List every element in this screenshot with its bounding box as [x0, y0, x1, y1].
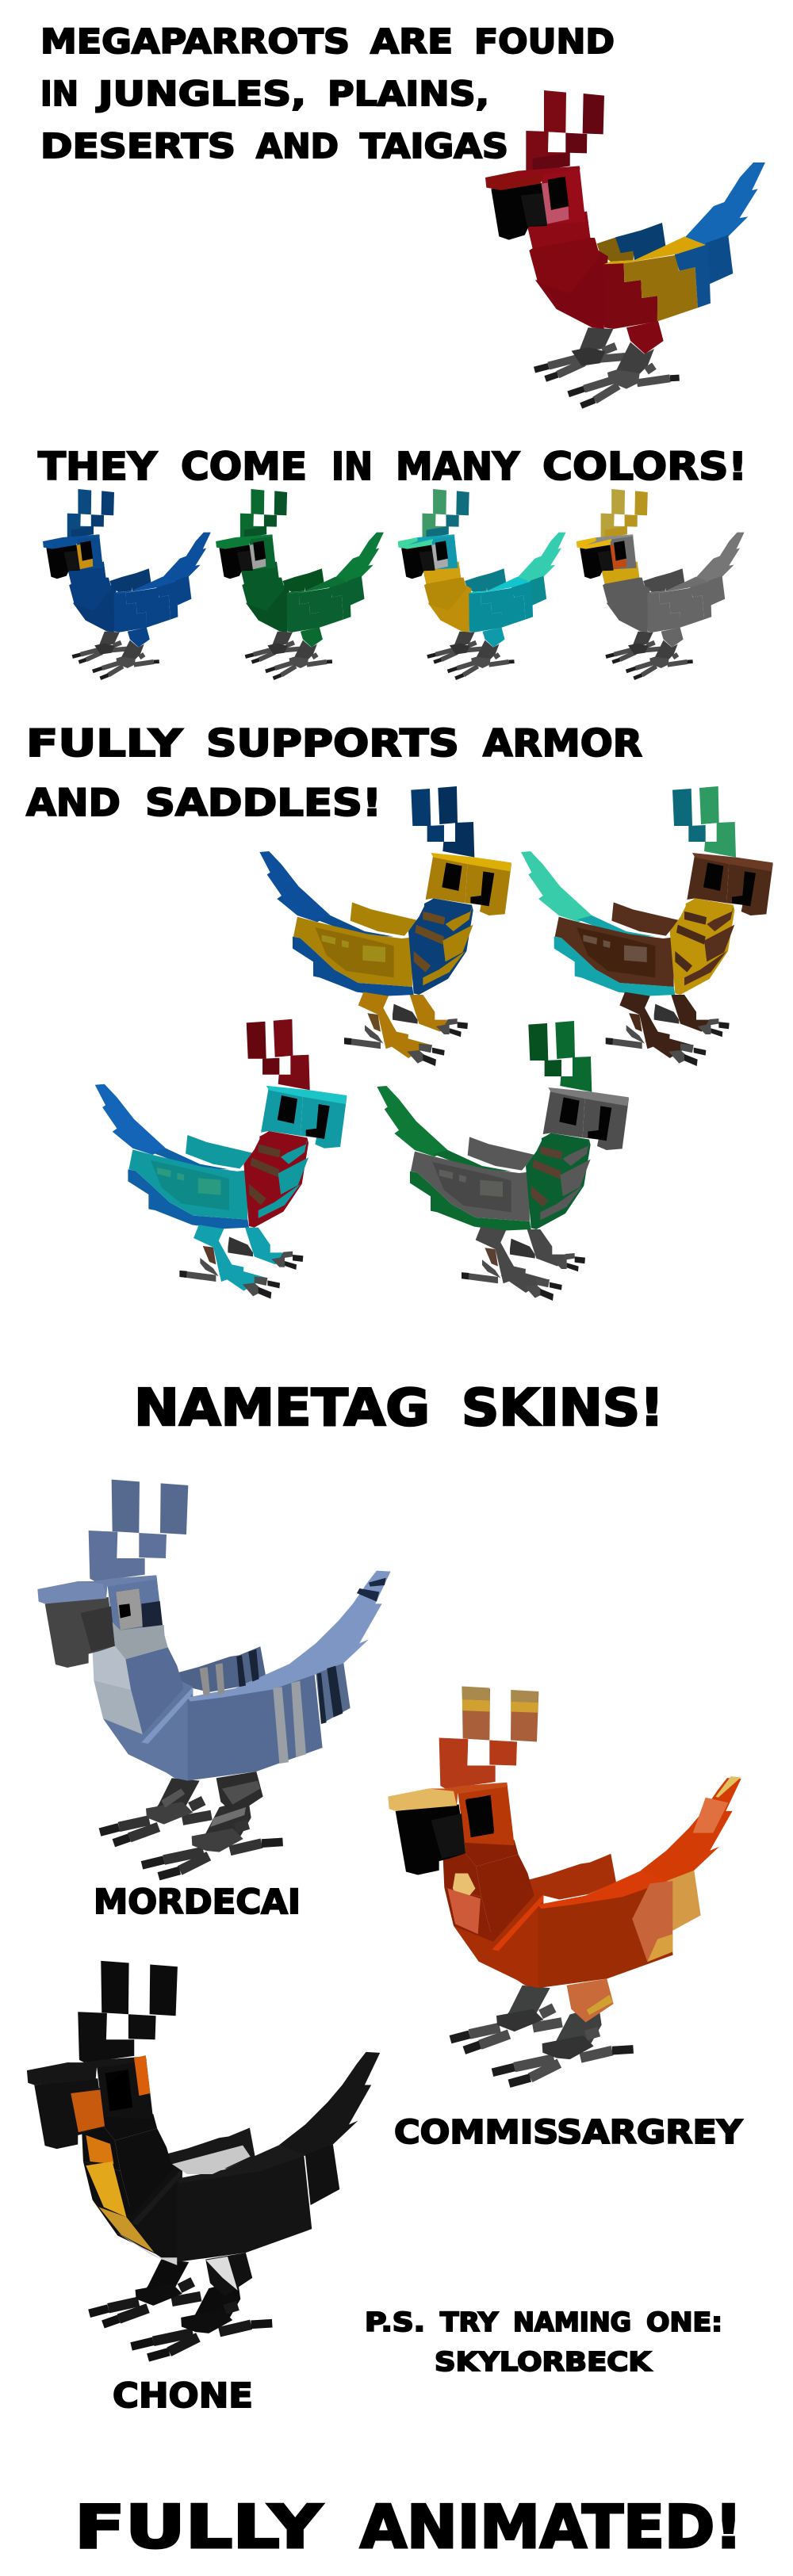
- heading: fully supports armor and saddles: AND: [26, 782, 121, 825]
- heading: where megaparrots are found: JUNGLES,: [96, 75, 306, 114]
- heading: they come in many colors: THEY: [38, 445, 158, 489]
- heading: fully supports armor and saddles: SADDLES!: [145, 782, 381, 825]
- heading: where megaparrots are found: AND: [256, 127, 339, 166]
- heading: nametag skins: SKINS!: [462, 1379, 664, 1438]
- parrot: green variant: [216, 489, 384, 678]
- heading: fully animated: FULLY: [75, 2492, 324, 2562]
- heading: where megaparrots are found: DESERTS: [40, 127, 236, 166]
- parrot: Mordecai blue jay skin: [37, 1480, 391, 1876]
- note: try naming one Skylorbeck: P.S.: [365, 2307, 425, 2337]
- parrot: diamond armor with saddle: [95, 1019, 347, 1299]
- heading: they come in many colors: COME: [181, 445, 307, 489]
- heading: fully animated: ANIMATED!: [360, 2492, 742, 2562]
- heading: fully supports armor and saddles: [26, 722, 642, 825]
- parrot: leather armor with saddle: [521, 786, 773, 1066]
- note: try naming one Skylorbeck: [365, 2307, 722, 2377]
- parrot: Chone black skin: [27, 1961, 380, 2357]
- note: try naming one Skylorbeck: TRY: [440, 2307, 499, 2337]
- label: CommissarGrey: COMMISSARGREY: [394, 2113, 743, 2151]
- note: try naming one Skylorbeck: SKYLORBECK: [435, 2346, 653, 2377]
- parrot: gold armor with saddle: [259, 786, 511, 1066]
- parrot: grey and yellow variant: [577, 489, 745, 678]
- heading: where megaparrots are found: TAIGAS: [360, 127, 508, 166]
- heading: where megaparrots are found: PLAINS,: [328, 75, 489, 114]
- heading: where megaparrots are found: [40, 22, 615, 166]
- heading: they come in many colors: COLORS!: [542, 445, 747, 489]
- heading: where megaparrots are found: ARE: [370, 22, 453, 62]
- parrot: aqua and gold variant: [398, 489, 566, 678]
- label: Chone: CHONE: [113, 2376, 253, 2416]
- heading: fully supports armor and saddles: ARMOR: [483, 722, 642, 766]
- heading: where megaparrots are found: MEGAPARROTS: [40, 22, 350, 62]
- heading: they come in many colors: MANY: [396, 445, 520, 489]
- heading: they come in many colors: IN: [331, 445, 373, 489]
- note: try naming one Skylorbeck: NAMING: [513, 2307, 631, 2337]
- parrot: scarlet main: [485, 90, 765, 406]
- heading: fully supports armor and saddles: FULLY: [26, 722, 183, 766]
- parrot: blue variant: [43, 489, 211, 678]
- heading: where megaparrots are found: FOUND: [474, 22, 615, 62]
- heading: nametag skins: NAMETAG: [134, 1379, 430, 1438]
- heading: where megaparrots are found: IN: [40, 75, 79, 114]
- label: Mordecai: MORDECAI: [94, 1882, 301, 1922]
- parrot: Commissar Grey phoenix skin: [388, 1687, 741, 2084]
- parrot: iron armor with saddle: [377, 1021, 629, 1301]
- note: try naming one Skylorbeck: ONE:: [646, 2307, 722, 2337]
- heading: fully supports armor and saddles: SUPPORTS: [206, 722, 459, 766]
